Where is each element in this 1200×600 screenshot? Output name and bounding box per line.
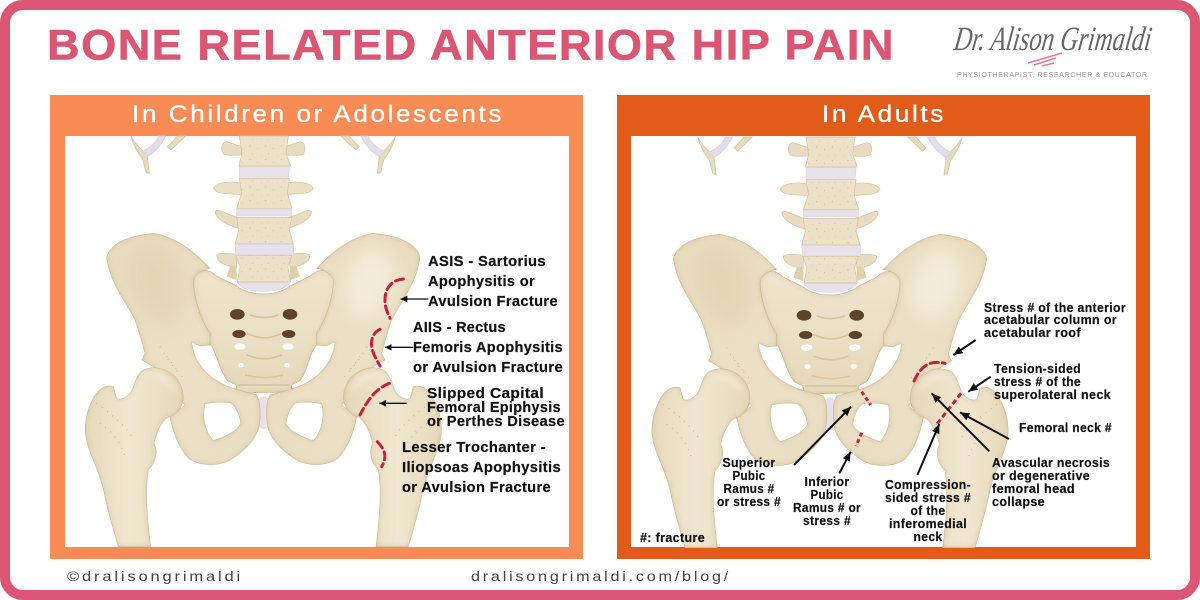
- label: avascular necrosis: [992, 456, 1110, 509]
- label: avascular necrosis: Avascular necrosis: [992, 456, 1110, 470]
- label: lesser trochanter: Lesser Trochanter -: [402, 440, 546, 456]
- anatomy illustration: pelvis adults: [652, 137, 1008, 548]
- label: superior pubic ramus: [717, 456, 781, 509]
- panel: children or adolescents: [50, 95, 583, 559]
- label: inferior pubic ramus: Inferior: [804, 475, 850, 489]
- label: compression-sided: sided stress #: [885, 491, 971, 505]
- label: compression-sided: inferomedial: [889, 517, 967, 531]
- label: ASIS: Apophysitis or: [428, 274, 535, 290]
- label: compression-sided: Compression-: [885, 478, 971, 492]
- label: superior pubic ramus: Pubic: [732, 469, 766, 483]
- arrows: children: [379, 299, 428, 403]
- label: slipped capital femoral epiphysis: Femoral Epiphysis: [427, 400, 561, 416]
- label: tension-sided: stress # of the: [994, 375, 1081, 389]
- label: femoral neck: Femoral neck #: [1019, 421, 1112, 435]
- label: inferior pubic ramus: stress #: [803, 514, 851, 528]
- label: lesser trochanter: or Avulsion Fracture: [402, 480, 551, 496]
- anatomy illustration: pelvis children: [85, 136, 441, 547]
- label: ASIS: ASIS - Sartorius: [428, 254, 546, 270]
- label: inferior pubic ramus: Pubic: [810, 488, 844, 502]
- label: superior pubic ramus: Superior: [722, 456, 776, 470]
- legend: fracture: #: fracture: [640, 531, 705, 545]
- label: compression-sided: neck: [914, 530, 942, 544]
- label: avascular necrosis: or degenerative: [992, 469, 1090, 483]
- label: AIIS: AIIS - Rectus: [413, 320, 506, 336]
- label: ASIS: [428, 254, 558, 310]
- label: AIIS: [413, 320, 563, 376]
- label: anterior acetabular column: acetabular roof: [984, 326, 1081, 340]
- footer: blog url: dralisongrimaldi.com/blog/: [471, 568, 731, 584]
- label: tension-sided: superolateral neck: [994, 388, 1111, 402]
- label: avascular necrosis: femoral head: [992, 482, 1075, 496]
- label: slipped capital femoral epiphysis: or Perthes Disease: [427, 414, 565, 430]
- label: anterior acetabular column: Stress # of the anterior: [984, 301, 1126, 315]
- panel heading: children: In Children or Adolescents: [132, 101, 504, 128]
- label: anterior acetabular column: [984, 301, 1126, 340]
- label: slipped capital femoral epiphysis: Slipped Capital: [427, 386, 544, 402]
- label: superior pubic ramus: or stress #: [717, 495, 781, 509]
- label: slipped capital femoral epiphysis: [427, 386, 565, 430]
- label: ASIS: Avulsion Fracture: [428, 294, 558, 310]
- label: anterior acetabular column: acetabular column or: [984, 313, 1117, 327]
- footer: social handle: ©dralisongrimaldi: [67, 568, 243, 584]
- label: compression-sided: of the: [910, 504, 946, 518]
- label: lesser trochanter: Iliopsoas Apophysitis: [402, 460, 561, 476]
- label: AIIS: Femoris Apophysitis: [413, 340, 563, 356]
- label: tension-sided: [994, 362, 1111, 402]
- label: avascular necrosis: collapse: [992, 495, 1045, 509]
- arrows: adults: [794, 340, 1009, 475]
- logo: [951, 21, 1154, 79]
- logo: PHYSIOTHERAPIST, RESEARCHER & EDUCATOR: [957, 72, 1147, 79]
- label: lesser trochanter: [402, 440, 561, 496]
- label: compression-sided: [885, 478, 971, 544]
- label: tension-sided: Tension-sided: [994, 362, 1081, 376]
- label: inferior pubic ramus: Ramus # or: [793, 501, 861, 515]
- label: AIIS: or Avulsion Fracture: [413, 360, 563, 376]
- label: inferior pubic ramus: [793, 475, 861, 528]
- panel: adults: [617, 95, 1150, 559]
- label: superior pubic ramus: Ramus #: [724, 482, 774, 496]
- title: BONE RELATED ANTERIOR HIP PAIN: [47, 22, 895, 70]
- panel heading: adults: In Adults: [822, 101, 946, 128]
